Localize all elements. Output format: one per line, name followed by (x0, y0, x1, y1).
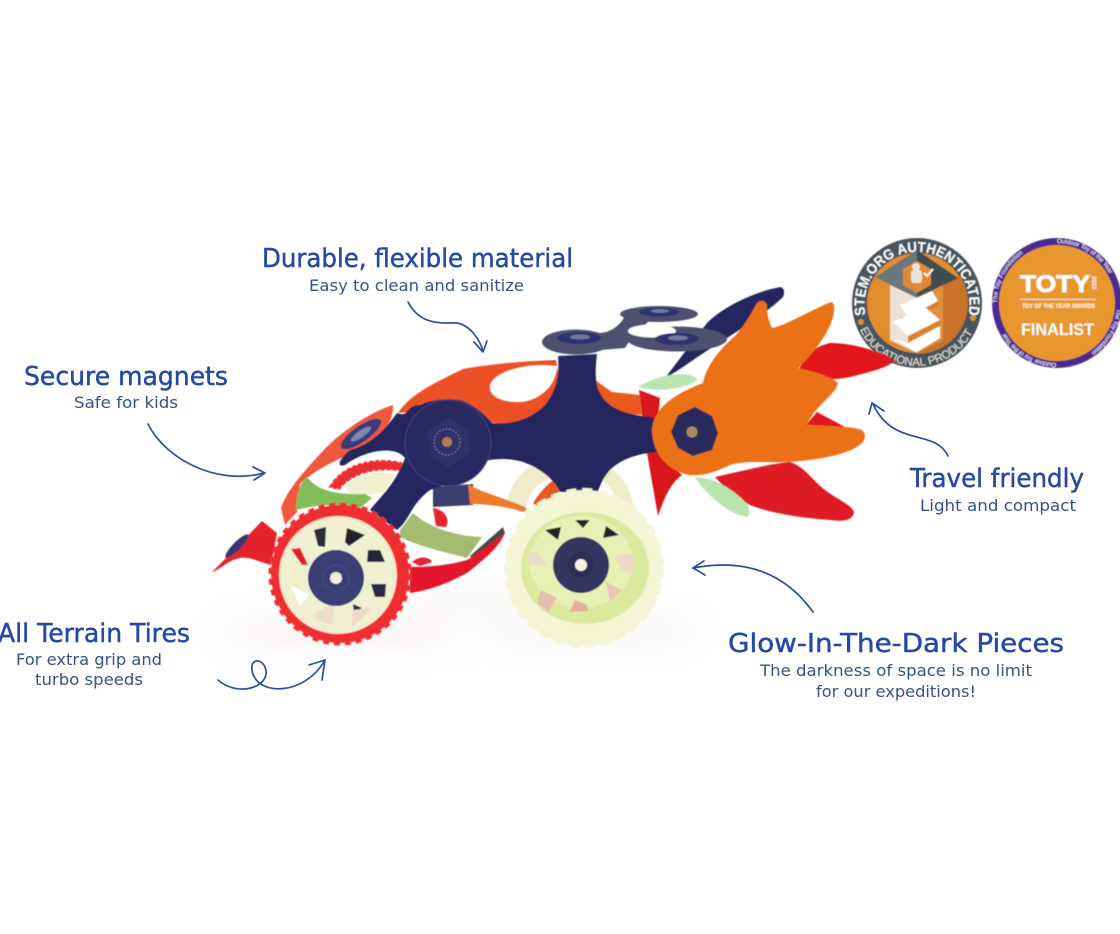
salmon disk band (281, 405, 393, 525)
navy star body (340, 354, 660, 530)
front cream wheel (506, 490, 662, 646)
heading: all terrain tires (0, 619, 190, 689)
navy tail behind the hand (665, 287, 784, 378)
striped band edge (470, 527, 505, 560)
arrow: travel friendly (869, 403, 948, 456)
toy vehicle (212, 287, 895, 646)
heading: all terrain tires: For extra grip and (16, 650, 162, 669)
arrow: glow in the dark (693, 561, 813, 612)
arrow: secure magnets (148, 424, 265, 480)
red small feather (806, 412, 845, 427)
floor shadow (220, 586, 700, 644)
orange hand (652, 301, 865, 475)
navy under strip (433, 484, 473, 507)
badge: Toy of the Year finalist: TOTY (1020, 271, 1090, 298)
heading: all terrain tires: turbo speeds (35, 670, 143, 689)
badge: Toy of the Year finalist: 2023 (1090, 276, 1096, 290)
heading: travel friendly: Travel friendly (909, 464, 1084, 494)
small tail disc (223, 532, 251, 560)
orange-red top band (398, 360, 562, 426)
heading: durable material (262, 244, 573, 295)
heading: glow in the dark: for our expeditions! (816, 682, 976, 701)
rear red wheel (330, 461, 447, 566)
heading: secure magnets: Safe for kids (74, 393, 178, 412)
grey trefoil top plate (542, 306, 727, 354)
red upper feather (798, 343, 895, 379)
green lower band (400, 513, 482, 558)
upper left disc magnet (337, 414, 385, 454)
badge: Toy of the Year finalist (991, 237, 1120, 369)
heading: glow in the dark: Glow-In-The-Dark Pieces (728, 629, 1064, 659)
rear cream wheel (515, 468, 628, 512)
heading: glow in the dark (728, 629, 1064, 701)
thin orange band (468, 484, 527, 512)
joint disc (405, 400, 491, 486)
heading: secure magnets (24, 362, 228, 412)
red lower feather (715, 462, 854, 521)
badge: Toy of the Year finalist: Outdoor Toy of the Year (1002, 333, 1057, 368)
badge: Toy of the Year finalist: The Toy Foundation (992, 250, 1024, 304)
heading: travel friendly: Light and compact (920, 496, 1076, 515)
joint hub (428, 418, 470, 467)
badge: Toy of the Year finalist: TOY OF THE YEAR AWARDS (1022, 303, 1096, 310)
front red wheel (270, 504, 410, 644)
heading: all terrain tires: All Terrain Tires (0, 619, 190, 649)
heading: travel friendly (909, 464, 1084, 515)
red vertical sliver (639, 390, 682, 516)
red left tail (212, 521, 277, 572)
badge: STEM.org authenticated: EDUCATIONAL PRODUCT (860, 326, 972, 367)
heading: glow in the dark: The darkness of space is no limit (759, 661, 1032, 680)
red lower band (410, 533, 505, 593)
light green leaves (638, 374, 750, 517)
heading: secure magnets: Secure magnets (24, 362, 228, 392)
hand hub (671, 407, 718, 456)
badge: Toy of the Year finalist: FINALIST (1021, 320, 1095, 339)
orange right band (595, 380, 642, 415)
heading: durable material: Easy to clean and sanitize (309, 276, 524, 295)
arrow: all terrain tires (218, 660, 325, 689)
badge: Toy of the Year finalist: Outdoor Toy of the Year (1056, 238, 1113, 274)
badge: STEM.org authenticated (851, 237, 983, 369)
heading: durable material: Durable, flexible material (262, 244, 573, 274)
badge: STEM.org authenticated: STEM.ORG AUTHENTICATED (854, 241, 980, 316)
arrow: durable material (408, 302, 487, 352)
green upper band (296, 477, 372, 510)
